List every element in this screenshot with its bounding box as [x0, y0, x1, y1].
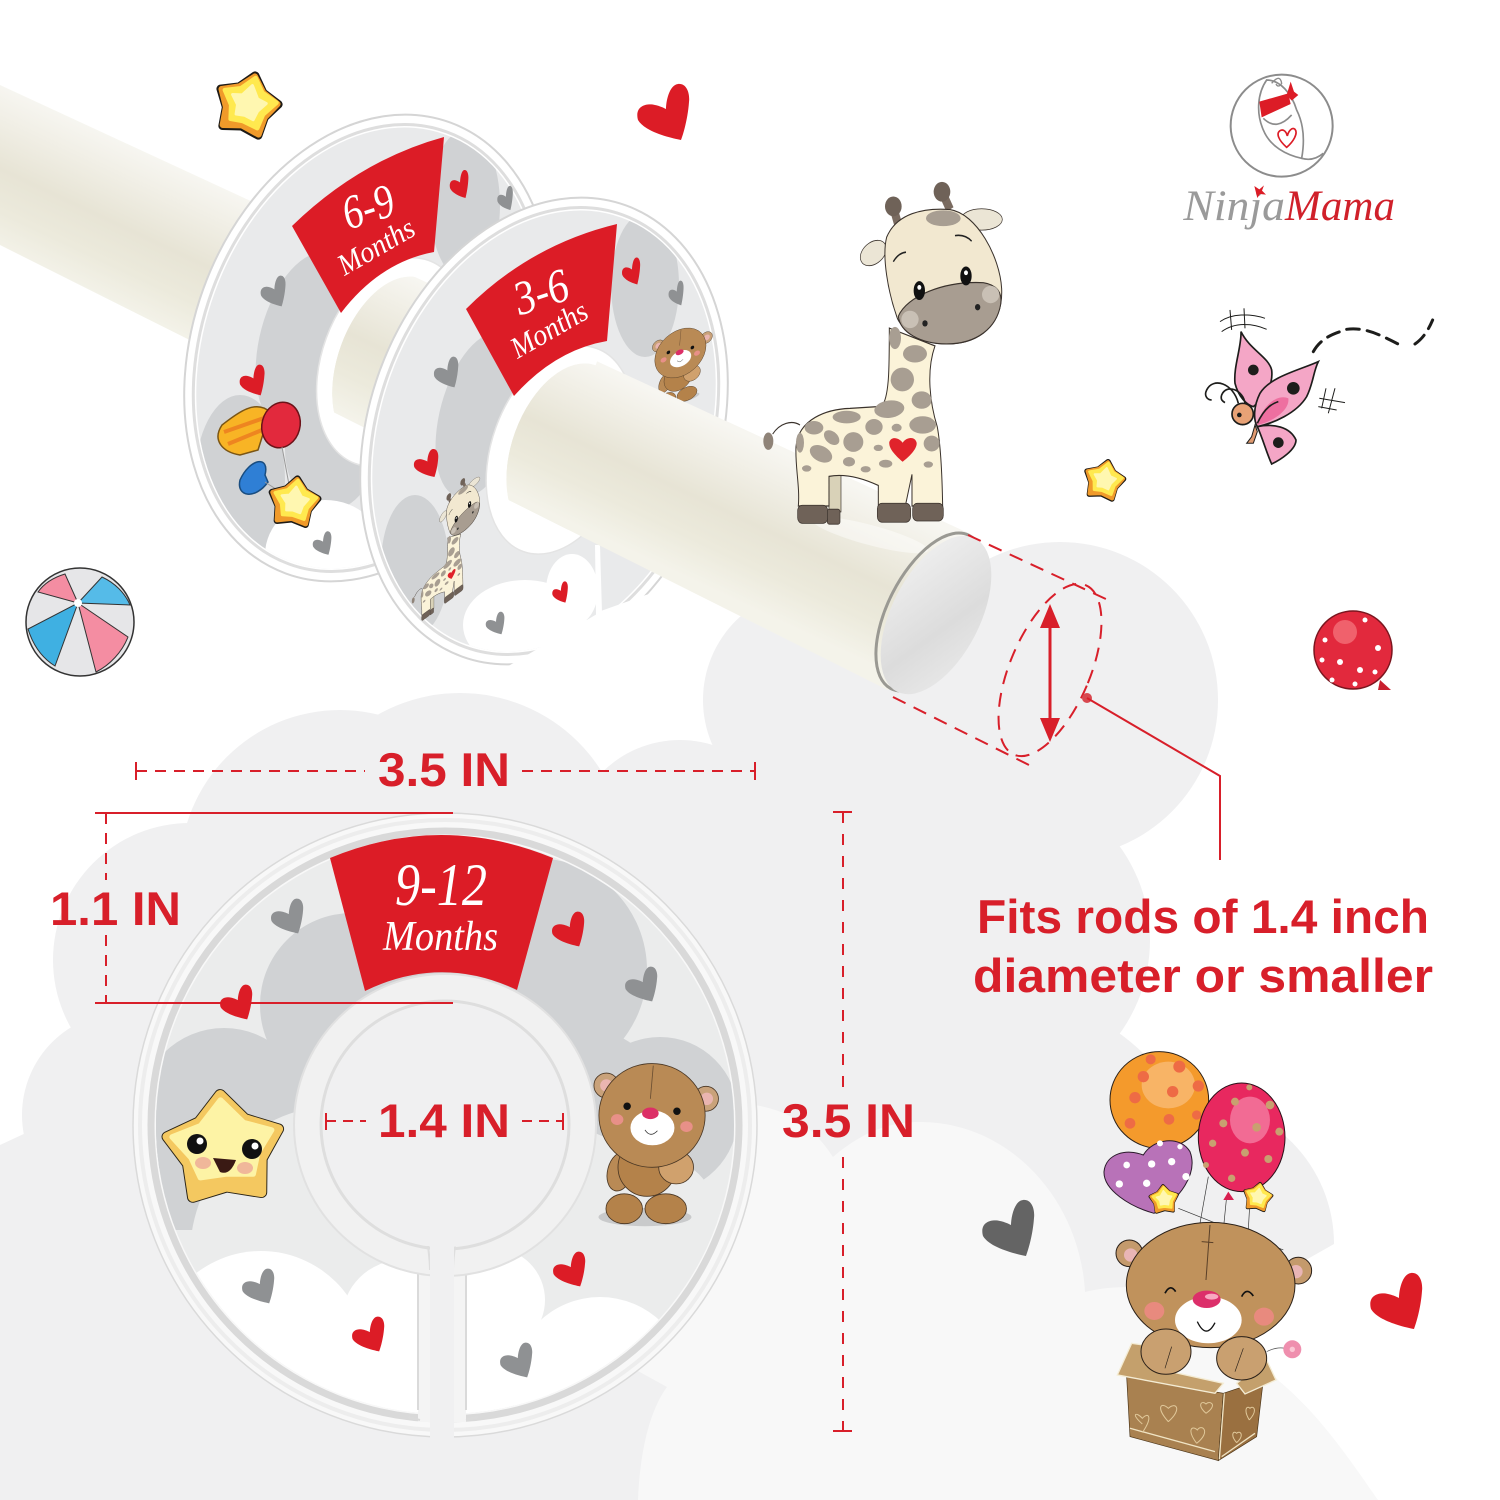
hole rim	[294, 974, 596, 1276]
loose star: top	[211, 68, 284, 138]
hole rim	[486, 347, 622, 554]
flower	[1267, 1340, 1301, 1358]
callout text	[973, 890, 1433, 1002]
hearts	[242, 899, 657, 1377]
red label: 9-12	[395, 852, 487, 918]
giraffe on rod	[763, 182, 1002, 524]
rod end cap	[854, 516, 1014, 712]
hearts	[240, 170, 513, 555]
mini bear	[652, 328, 713, 402]
loose heart: top	[637, 84, 689, 140]
ring: 3-6 months	[360, 196, 729, 666]
beach ball	[26, 568, 134, 676]
box	[1117, 1343, 1276, 1461]
rod diameter guide	[893, 535, 1220, 860]
red label: Months	[382, 914, 498, 960]
background clouds	[0, 542, 1378, 1500]
loose heart: gray	[982, 1200, 1034, 1256]
dimension: hole	[326, 1113, 563, 1130]
callout text: diameter or smaller	[973, 949, 1433, 1002]
orange balloon	[1110, 1052, 1209, 1148]
logo	[1182, 75, 1395, 230]
red label: Months	[504, 294, 594, 366]
rod	[0, 85, 968, 690]
dimension: height	[833, 812, 852, 1431]
heart over rim line	[220, 985, 252, 1019]
hearts	[414, 258, 684, 634]
red label	[292, 137, 444, 313]
ring: 9-12 months flat	[133, 813, 757, 1473]
pink balloon	[1198, 1083, 1285, 1200]
bear in box with balloons	[1104, 1052, 1312, 1461]
balloons	[218, 398, 305, 495]
teddy bear	[594, 1064, 718, 1226]
red balloon	[1314, 611, 1392, 690]
red label	[466, 224, 617, 396]
callout text: Fits rods of 1.4 inch	[977, 890, 1429, 943]
dimension: rim band	[95, 813, 453, 1003]
dimension: width	[136, 762, 755, 780]
balloon stars	[1150, 1182, 1273, 1212]
bear paws	[1141, 1329, 1267, 1380]
label: 3.5 IN height: 3.5 IN	[782, 1094, 915, 1147]
label: 1.1 IN: 1.1 IN	[50, 882, 181, 935]
hole rim	[316, 258, 440, 466]
logo: Ninja	[1182, 182, 1285, 230]
ring: 6-9 months	[183, 114, 534, 582]
red label	[330, 835, 553, 991]
loose star: right	[1082, 458, 1127, 501]
butterfly	[1206, 308, 1433, 464]
smiling star	[165, 1091, 283, 1199]
mini giraffe	[412, 476, 480, 621]
slot rim	[417, 1274, 467, 1422]
label: 1.4 IN: 1.4 IN	[378, 1094, 510, 1147]
rod through first ring	[334, 292, 532, 453]
label: 3.5 IN width: 3.5 IN	[378, 743, 510, 796]
red label: Months	[331, 211, 421, 283]
star	[268, 475, 321, 526]
red label: 3-6	[506, 259, 576, 326]
purple heart balloon	[1104, 1140, 1192, 1213]
logo: Mama	[1284, 182, 1395, 230]
bear head	[1116, 1222, 1312, 1348]
rod through second ring	[510, 362, 928, 577]
red label: 6-9	[335, 174, 401, 240]
loose heart: red	[1370, 1273, 1422, 1329]
